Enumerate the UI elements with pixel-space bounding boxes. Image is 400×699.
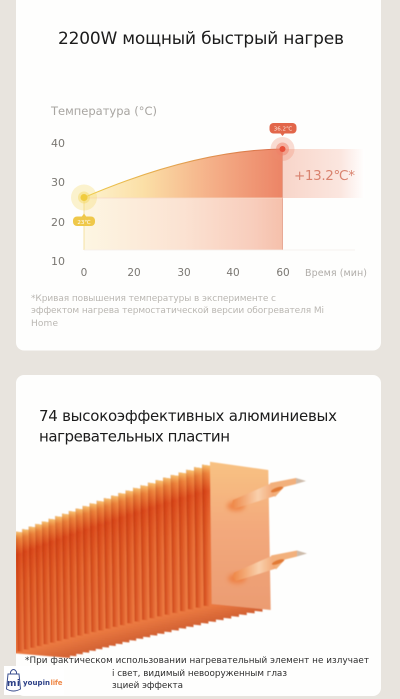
- rise label: +13.2℃*: [294, 168, 355, 184]
- y axis ticks: 40: [51, 137, 65, 150]
- end marker: [270, 123, 296, 161]
- bottom note third line: зцией эффекта: [112, 681, 183, 691]
- lower pin: [228, 550, 307, 584]
- x axis ticks: 0: [81, 267, 87, 279]
- lower area: [84, 198, 282, 250]
- start marker: 23℃: [77, 219, 91, 226]
- bottom note second line: і свет, видимый невооруженным глаз: [112, 669, 287, 679]
- watermark logo: mi: [7, 679, 20, 689]
- x axis ticks: 60: [276, 267, 290, 279]
- heading: [39, 407, 337, 446]
- heading: нагревательных пластин: [39, 428, 230, 446]
- icon: shopping bag: [6, 670, 20, 691]
- end marker: 36.2℃: [274, 126, 292, 132]
- panel: heating chart card: [16, 0, 381, 350]
- y axis ticks: [51, 137, 65, 268]
- y axis ticks: 10: [51, 255, 65, 268]
- panel: aluminium plates card: [10, 375, 381, 696]
- heating element illustration: [10, 462, 307, 658]
- chart footnote: эффектом нагрева термостатической версии обогревателя Mi: [31, 306, 324, 316]
- x axis ticks: 30: [177, 267, 191, 279]
- y axis ticks: 30: [51, 176, 65, 189]
- guide lines: [84, 149, 355, 250]
- y axis ticks: 20: [51, 216, 65, 229]
- x axis ticks: 40: [226, 267, 240, 279]
- chart footnote: [31, 294, 324, 329]
- radiator fins: [10, 465, 263, 658]
- temperature line chart: [50, 104, 367, 279]
- watermark logo: [4, 666, 64, 695]
- upper area under curve: [84, 149, 282, 198]
- front plate: [210, 462, 271, 610]
- x axis title: Время (мин): [305, 268, 367, 279]
- start marker: [71, 184, 97, 226]
- x axis ticks: 20: [127, 267, 141, 279]
- title: 2200W мощный быстрый нагрев: [58, 29, 344, 49]
- chart footnote: Home: [31, 319, 58, 329]
- x axis ticks: [81, 267, 290, 279]
- curve line: [84, 149, 282, 198]
- watermark logo: youpin: [23, 679, 50, 687]
- watermark logo: life: [50, 679, 63, 687]
- chart footnote: *Кривая повышения температуры в эксперименте с: [31, 294, 276, 304]
- rise band: [282, 149, 364, 198]
- upper pin: [227, 478, 306, 511]
- heading: 74 высокоэффективных алюминиевых: [39, 407, 337, 425]
- y axis title: Температура (°C): [50, 104, 157, 118]
- bottom note first line: *При фактическом использовании нагревательный элемент не излучает: [25, 656, 369, 666]
